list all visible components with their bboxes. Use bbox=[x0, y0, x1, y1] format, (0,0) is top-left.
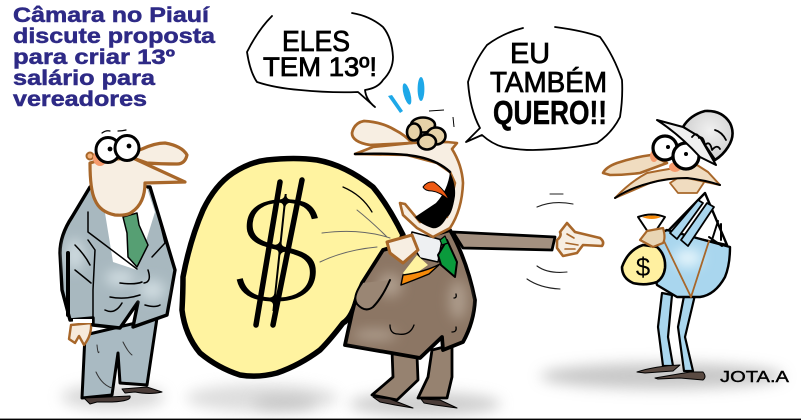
green tie bbox=[438, 240, 457, 277]
gripping hand bbox=[387, 235, 418, 263]
jaw bbox=[355, 142, 463, 237]
lower lip bbox=[615, 165, 720, 198]
pupils bbox=[108, 144, 131, 151]
bottom border line bbox=[0, 419, 801, 420]
small bag dollar: $ bbox=[636, 252, 651, 282]
overalls bbox=[645, 230, 730, 297]
tie knot bbox=[440, 236, 448, 245]
speech bubble: eu tambem quero bbox=[466, 27, 622, 150]
suspender lines bbox=[664, 241, 709, 297]
pocket tools bbox=[709, 221, 722, 246]
chin bbox=[670, 170, 707, 193]
jacket highlights bbox=[66, 239, 165, 300]
trouser folds bbox=[96, 342, 132, 388]
overalls highlight bbox=[674, 249, 702, 267]
arm bbox=[453, 232, 555, 250]
nose bbox=[133, 143, 187, 164]
trousers bbox=[82, 318, 157, 398]
boots bbox=[637, 365, 705, 380]
cheek bbox=[93, 150, 107, 166]
shirt cuff bbox=[73, 319, 92, 323]
legs bbox=[658, 293, 695, 371]
speech bubble: eles tem 13: ELES bbox=[282, 26, 350, 58]
bag creases bbox=[320, 210, 390, 262]
motion lines bbox=[527, 194, 573, 289]
tie bbox=[123, 213, 148, 267]
helmet hair marks bbox=[692, 130, 726, 150]
surprise marks bbox=[429, 110, 454, 127]
helmet dome bbox=[683, 111, 733, 160]
sleeve and folds bbox=[355, 280, 390, 309]
dollar sign end masks bbox=[250, 178, 305, 330]
shirt bbox=[667, 193, 727, 245]
ground shadows bbox=[61, 363, 784, 416]
title: discute proposta bbox=[13, 25, 215, 48]
cheeks bbox=[650, 150, 681, 172]
speech bubble: eles tem 13: TEM 13º! bbox=[263, 52, 377, 82]
straps bbox=[670, 200, 714, 246]
shoes bbox=[373, 397, 457, 408]
speech bubble: eles tem 13 bbox=[247, 13, 393, 107]
bag corner at chest bbox=[403, 255, 428, 279]
nose bbox=[603, 155, 667, 175]
figure: shouting man in brown suit bbox=[345, 118, 603, 408]
holding hand bbox=[640, 228, 664, 247]
pointing hand bbox=[557, 223, 603, 256]
dollar bars bbox=[256, 180, 302, 325]
bag opening bbox=[642, 216, 661, 219]
shirt bbox=[100, 188, 155, 270]
figure: man in grey suit bbox=[60, 130, 187, 404]
bag neck bbox=[638, 214, 665, 232]
money bag bbox=[182, 158, 403, 376]
orange strap bbox=[401, 264, 440, 285]
shoes bbox=[84, 387, 162, 404]
suit highlights bbox=[353, 273, 467, 341]
eyes bbox=[96, 136, 139, 162]
title: Câmara no Piauí bbox=[13, 4, 210, 27]
bag dollar sign: $ bbox=[223, 158, 334, 343]
mouth line bbox=[615, 178, 720, 198]
eyes bbox=[653, 136, 699, 169]
jacket bbox=[60, 187, 175, 328]
eyebrows bbox=[102, 130, 126, 133]
title: salário para bbox=[13, 67, 155, 90]
trousers bbox=[372, 345, 452, 400]
title bbox=[13, 4, 215, 111]
lapels and folds bbox=[75, 210, 165, 318]
bag body bbox=[182, 158, 403, 376]
speech bubble: eu tambem quero: QUERO!! bbox=[493, 94, 607, 131]
small money bag bbox=[622, 245, 665, 284]
hand bbox=[69, 323, 91, 345]
title: vereadores bbox=[13, 88, 147, 111]
ear bbox=[86, 152, 94, 160]
face bbox=[90, 158, 185, 215]
signature: JOTA.A bbox=[720, 369, 789, 386]
figure: worker with hard hat bbox=[603, 111, 733, 380]
sweat drops bbox=[388, 77, 424, 113]
helmet brim bbox=[657, 120, 716, 165]
nose bbox=[352, 121, 412, 145]
speech bubble: eu tambem quero: TAMBÉM bbox=[490, 66, 607, 99]
open mouth bbox=[415, 172, 455, 228]
tongue bbox=[423, 182, 449, 200]
fist on head bbox=[407, 118, 446, 150]
speech bubble: eu tambem quero: EU bbox=[510, 38, 550, 70]
collar and shirt bbox=[410, 232, 442, 262]
title: para criar 13º bbox=[13, 46, 175, 69]
suit body bbox=[345, 230, 475, 358]
lower lip line bbox=[355, 154, 450, 172]
pupils bbox=[666, 145, 688, 156]
